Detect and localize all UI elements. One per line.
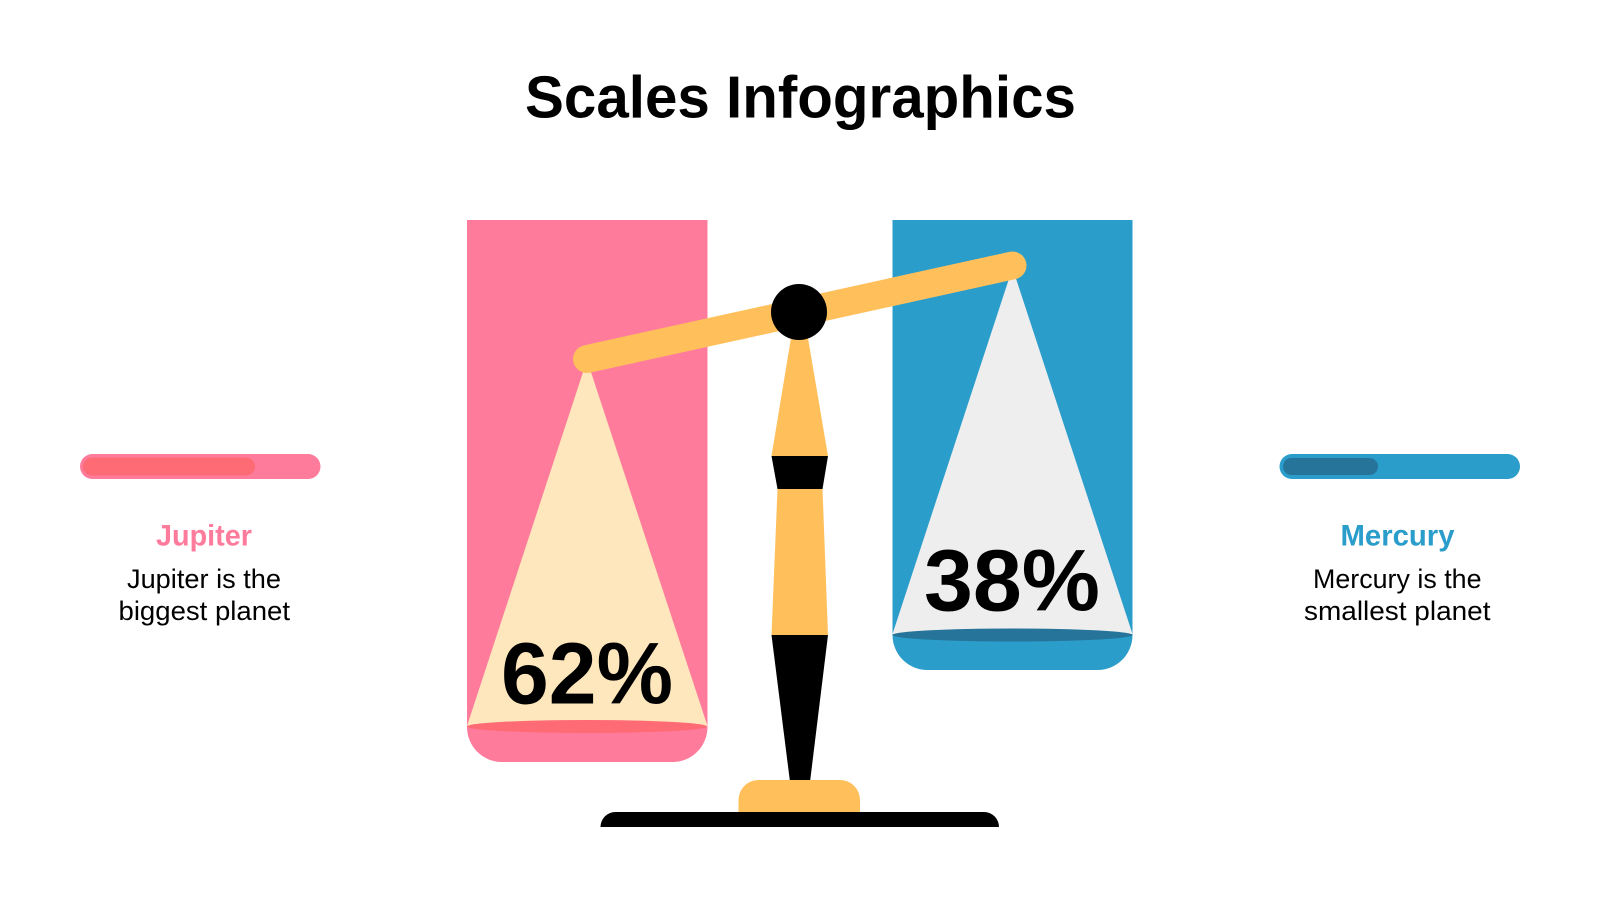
base [600,780,999,827]
progress bar: Mercury [1280,454,1520,479]
label: Jupiter: Jupiter [156,520,252,552]
value: 62%: 62% [501,626,673,722]
right scale pan: 38% [892,268,1132,642]
beam [587,266,1012,359]
label: Mercury: Mercury [1340,520,1455,552]
progress bar: Jupiter [80,454,320,479]
pivot [771,284,827,340]
description: Mercury: Mercury is the [1313,564,1482,594]
description: Jupiter: Jupiter is the [127,564,281,594]
scale: stand and beam [587,266,1012,827]
panel: Jupiter legend [80,454,320,626]
description: Jupiter: biggest planet [118,596,291,626]
description: Mercury [1304,564,1491,626]
panel: pink Jupiter column [467,220,708,762]
panel: blue Mercury column [892,220,1132,670]
column [772,338,828,782]
title: Scales Infographics [525,64,1076,130]
value: 38%: 38% [924,532,1100,630]
description: Mercury: smallest planet [1304,596,1491,626]
panel: Mercury legend [1280,454,1520,626]
description: Jupiter [118,564,291,626]
left scale pan: 62% [467,360,708,733]
